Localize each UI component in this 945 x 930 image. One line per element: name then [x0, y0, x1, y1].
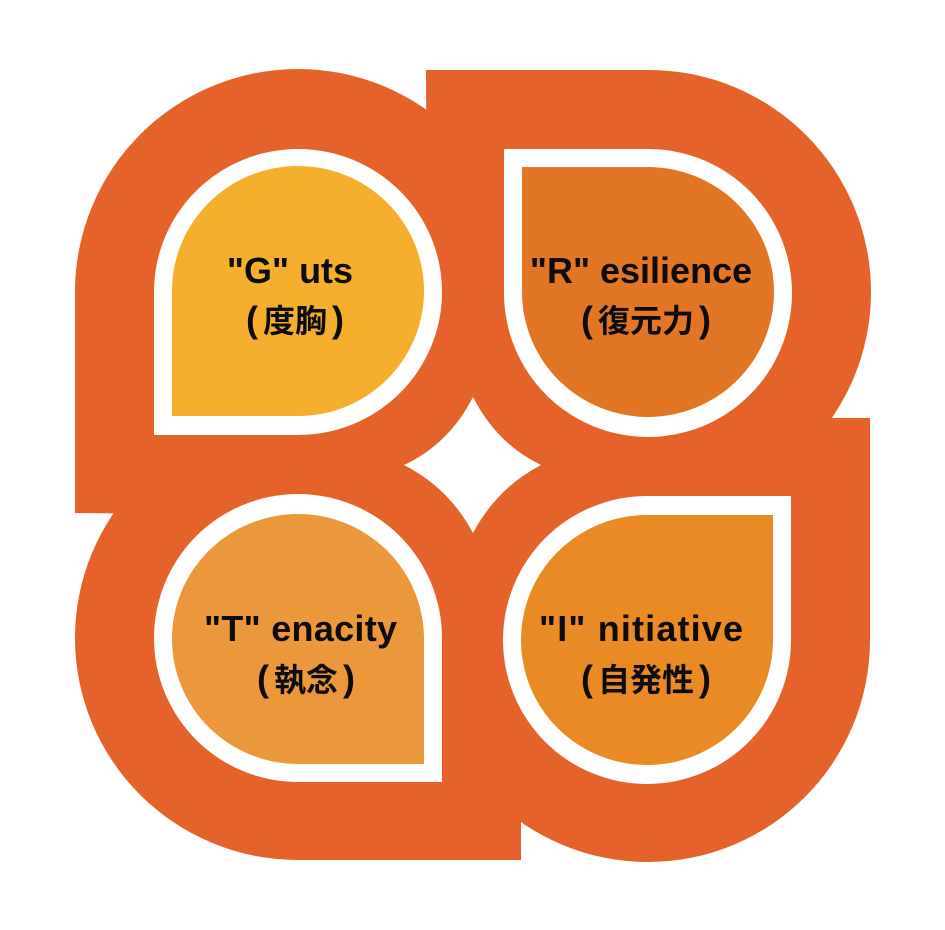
- center star: [404, 397, 541, 533]
- orange background shape: [75, 69, 871, 862]
- panel: Tenacity: [154, 494, 442, 782]
- label: Initiative: [539, 608, 743, 699]
- label: Tenacity: "T" enacity: [204, 608, 397, 649]
- panel: Guts: [154, 149, 442, 435]
- label: Guts: [227, 250, 353, 340]
- label: Initiative: (自発性): [581, 658, 711, 699]
- label: Guts: "G" uts: [227, 250, 353, 291]
- label: Tenacity: (執念): [257, 658, 355, 699]
- label: Tenacity: [204, 608, 397, 699]
- label: Resilience: (復元力): [581, 299, 711, 340]
- panel: Initiative: [503, 496, 791, 784]
- label: Resilience: "R" esilience: [530, 250, 752, 291]
- label: Initiative: "I" nitiative: [539, 608, 743, 649]
- panel: Resilience: [504, 149, 792, 437]
- label: Guts: (度胸): [246, 299, 344, 340]
- label: Resilience: [530, 250, 752, 340]
